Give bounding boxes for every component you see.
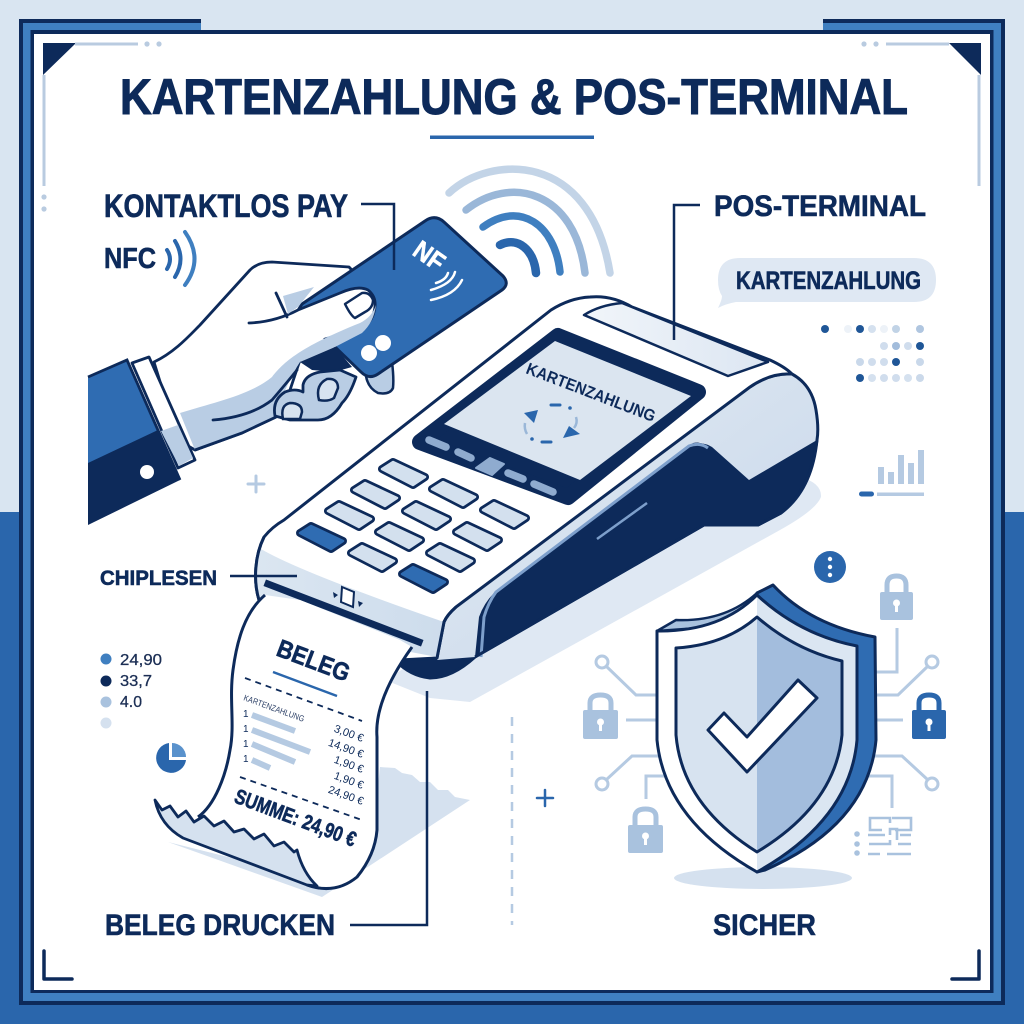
receipt quantities: 1 xyxy=(243,709,249,720)
label: NFC with waves xyxy=(104,232,194,285)
check mark xyxy=(708,680,817,772)
receipt paper xyxy=(155,595,412,889)
payment card xyxy=(297,218,506,377)
lock left xyxy=(583,695,618,739)
receipt edges xyxy=(198,595,412,889)
thumb nail xyxy=(345,293,373,318)
receipt quantities xyxy=(243,709,249,765)
lock top right xyxy=(880,576,913,620)
plus marks xyxy=(248,476,553,806)
function buttons xyxy=(429,440,553,492)
decorative dot matrix xyxy=(821,325,924,382)
speech bubble: KARTENZAHLUNG xyxy=(736,267,921,295)
dashed divider xyxy=(511,717,513,925)
receipt heading: BELEG xyxy=(273,634,354,688)
receipt prices xyxy=(326,723,365,808)
receipt prices: 1,90 € xyxy=(332,754,365,776)
label: POS-Terminal with leader xyxy=(674,190,926,340)
finger behind card xyxy=(366,362,393,393)
card NFC text: NF xyxy=(408,234,451,277)
jacket sleeve xyxy=(88,360,180,525)
receipt curl xyxy=(155,800,317,886)
receipt quantities: 1 xyxy=(243,754,249,765)
info dot xyxy=(814,551,846,583)
receipt slot xyxy=(268,584,419,642)
receipt prices: 14,90 € xyxy=(326,737,365,761)
lock right blue xyxy=(912,695,946,739)
label: Beleg drucken with leader: BELEG DRUCKEN xyxy=(105,909,335,942)
receipt item header: KARTENZAHLUNG xyxy=(242,692,306,724)
speech bubble xyxy=(718,258,936,308)
receipt quantities: 1 xyxy=(243,739,249,750)
circuit chip glyph xyxy=(856,818,911,854)
legend list xyxy=(100,652,162,728)
legend list: 24,90 xyxy=(120,652,162,669)
terminal shadow xyxy=(385,477,821,702)
card NFC waves xyxy=(431,272,462,300)
terminal light side strip xyxy=(437,374,818,660)
locks xyxy=(583,576,946,853)
label: POS-Terminal with leader: POS-TERMINAL xyxy=(714,190,926,223)
finger nails xyxy=(282,379,338,419)
receipt prices: 3,00 € xyxy=(332,723,365,745)
label: Beleg drucken with leader xyxy=(105,691,427,942)
shield outer ring xyxy=(657,595,757,872)
receipt quantities: 1 xyxy=(243,724,249,735)
shield inner panel xyxy=(676,617,757,852)
receipt shadow xyxy=(168,767,470,897)
lock bottom xyxy=(628,809,663,853)
screen xyxy=(444,341,691,480)
receipt prices: 1,90 € xyxy=(332,770,365,792)
shield ground shadow xyxy=(674,867,852,889)
terminal front lip xyxy=(256,549,444,657)
label: NFC with waves: NFC xyxy=(104,243,156,275)
terminal side outline xyxy=(475,374,818,657)
receipt total: SUMME: 24,90 € xyxy=(231,785,359,852)
loading arrows xyxy=(524,405,580,442)
receipt prices: 24,90 € xyxy=(326,784,365,808)
shadow under thumb xyxy=(300,347,352,372)
POS terminal xyxy=(256,297,818,678)
hand palm xyxy=(154,262,380,450)
mini bar chart xyxy=(859,450,924,496)
curled fingers xyxy=(274,370,356,420)
printer flap xyxy=(584,303,768,376)
palm underside xyxy=(180,305,376,450)
label: Sicher: SICHER xyxy=(713,909,816,942)
label: Kontaktlos Pay: KONTAKTLOS PAY xyxy=(104,188,348,224)
keypad xyxy=(300,462,526,590)
hand holding card xyxy=(88,218,506,525)
legend list: 33,7 xyxy=(120,673,152,690)
Kontaktlos leader line xyxy=(361,204,394,270)
pie chart icon xyxy=(156,743,186,773)
terminal top face xyxy=(256,297,792,660)
security circuit lines xyxy=(596,628,938,808)
label: Chiplesen with leader: CHIPLESEN xyxy=(100,566,217,590)
receipt xyxy=(155,595,412,889)
contactless waves xyxy=(449,169,610,273)
card slot icon xyxy=(333,587,363,607)
card logo xyxy=(361,335,391,361)
thumb xyxy=(249,288,375,345)
screen bezel xyxy=(420,336,698,497)
shield xyxy=(657,585,876,872)
shield back xyxy=(757,585,876,872)
shield bevel xyxy=(657,593,757,631)
shirt cuff xyxy=(132,357,195,468)
receipt item bars xyxy=(252,715,310,768)
title: KARTENZAHLUNG & POS-TERMINAL xyxy=(120,69,908,125)
title underline xyxy=(430,136,594,139)
terminal base and dark side xyxy=(395,440,817,678)
screen text: KARTENZAHLUNG xyxy=(524,360,658,426)
legend list: 4.0 xyxy=(120,694,142,711)
